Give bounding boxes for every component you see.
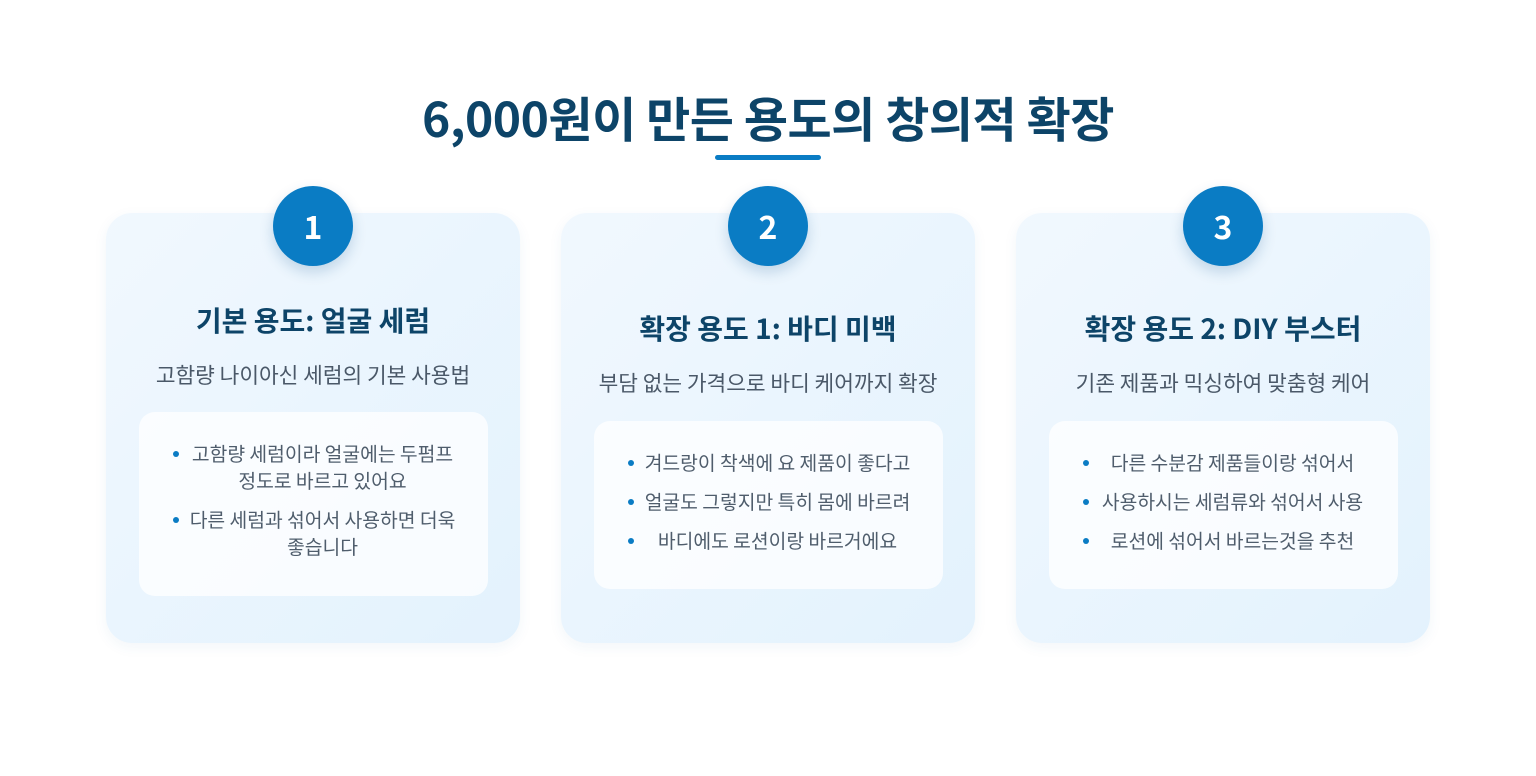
number badge 1: 1: [304, 203, 322, 249]
number badge 2: 2: [759, 203, 777, 249]
number badge 2: [728, 186, 808, 266]
card 3 bullet list: 다른 수분감 제품들이랑 섞어서: [1111, 448, 1354, 476]
card 1 subtitle: 고함량 나이아신 세럼의 기본 사용법: [156, 359, 470, 390]
card 1 bullet list: 고함량 세럼이라 얼굴에는 두펌프 정도로 바르고 있어요: [192, 439, 453, 494]
number badge 3: [1183, 186, 1263, 266]
number badge 3: 3: [1214, 203, 1232, 249]
card 2 bullet list: [594, 421, 943, 589]
panel: card 1: [106, 213, 520, 643]
card 2 bullet list: 얼굴도 그렇지만 특히 몸에 바르려: [645, 487, 910, 515]
panel: card 2: [561, 213, 975, 643]
number badge 1: [273, 186, 353, 266]
title underline: [715, 155, 821, 160]
title: 6,000원이 만든 용도의 창의적 확장: [422, 81, 1114, 151]
card 2 bullet list: 겨드랑이 착색에 요 제품이 좋다고: [645, 448, 910, 476]
card 2 subtitle: 부담 없는 가격으로 바디 케어까지 확장: [599, 367, 937, 398]
card 3 heading: 확장 용도 2: DIY 부스터: [1085, 308, 1361, 348]
card 1 heading: 기본 용도: 얼굴 세럼: [196, 300, 430, 340]
card 1 bullet list: 다른 세럼과 섞어서 사용하면 더욱 좋습니다: [190, 505, 455, 560]
card 1 bullet list: [139, 412, 488, 596]
card 2 heading: 확장 용도 1: 바디 미백: [639, 308, 897, 348]
panel: card 3: [1016, 213, 1430, 643]
card 3 bullet list: [1049, 421, 1398, 589]
card 3 subtitle: 기존 제품과 믹싱하여 맞춤형 케어: [1076, 367, 1370, 398]
card 2 bullet list: 바디에도 로션이랑 바르거에요: [658, 526, 897, 554]
card 3 bullet list: 사용하시는 세럼류와 섞어서 사용: [1102, 487, 1363, 515]
card 3 bullet list: 로션에 섞어서 바르는것을 추천: [1111, 526, 1354, 554]
